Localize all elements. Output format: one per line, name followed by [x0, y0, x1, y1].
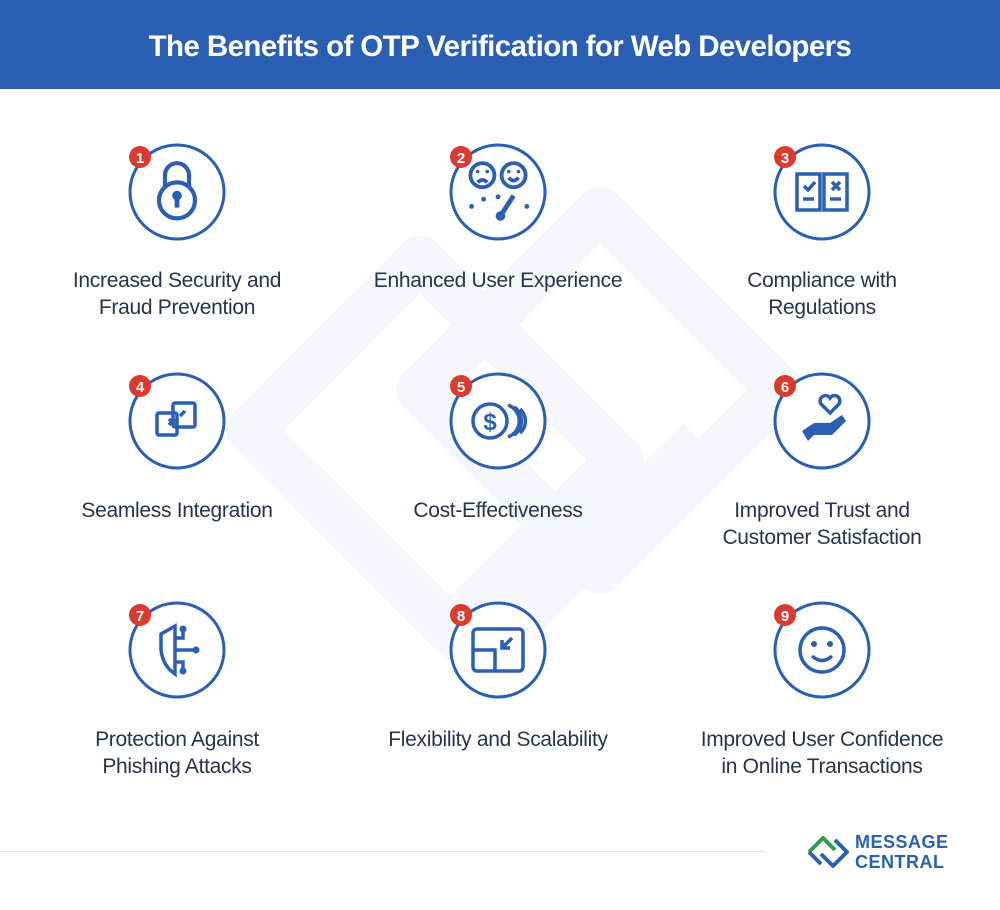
label 1 — [73, 269, 281, 319]
label 6 — [722, 499, 922, 549]
label 3 — [747, 269, 897, 319]
logo — [808, 832, 949, 872]
label 7: Protection Against — [95, 728, 259, 751]
label 1: Fraud Prevention — [99, 296, 255, 319]
label 7 — [95, 728, 260, 778]
label 2: Enhanced User Experience — [374, 269, 622, 292]
label 3: Regulations — [768, 296, 876, 319]
label 8: Flexibility and Scalability — [388, 728, 608, 751]
icon: hand heart 6 — [774, 374, 869, 468]
icon: integration 4 — [129, 374, 224, 468]
icon: shield 7: 7 — [136, 608, 144, 625]
label 6: Customer Satisfaction — [722, 526, 922, 549]
icon: resize 8: 8 — [457, 608, 465, 625]
icon: resize 8 — [450, 603, 545, 697]
label 9 — [701, 728, 943, 778]
label 9: in Online Transactions — [721, 755, 923, 778]
title — [0, 0, 1000, 89]
icon: book 3: 3 — [781, 150, 789, 167]
icon: book 3 — [774, 145, 869, 239]
logo: CENTRAL — [855, 852, 944, 872]
icon: integration 4: 4 — [136, 379, 145, 396]
icon: coins 5: 5 — [457, 379, 465, 396]
label 4: Seamless Integration — [81, 499, 273, 522]
label 1: Increased Security and — [73, 269, 281, 292]
icon: faces 2 — [450, 145, 545, 239]
icon: coins 5 — [450, 374, 545, 468]
icon: smile 9: 9 — [781, 608, 789, 625]
logo: MESSAGE — [855, 832, 949, 852]
icon: lock 1 — [129, 145, 224, 239]
title: The Benefits of OTP Verification for Web Developers — [149, 30, 851, 63]
icon: shield 7 — [129, 603, 224, 697]
icon: smile 9 — [774, 603, 869, 697]
icon: hand heart 6: 6 — [781, 379, 789, 396]
label 3: Compliance with — [747, 269, 897, 292]
icon: faces 2: 2 — [457, 150, 465, 167]
label 7: Phishing Attacks — [102, 755, 252, 778]
label 9: Improved User Confidence — [701, 728, 943, 751]
label 6: Improved Trust and — [734, 499, 910, 522]
icon: lock 1: 1 — [136, 150, 144, 167]
icon: coins 5: $ — [483, 409, 497, 436]
label 5: Cost-Effectiveness — [413, 499, 583, 522]
